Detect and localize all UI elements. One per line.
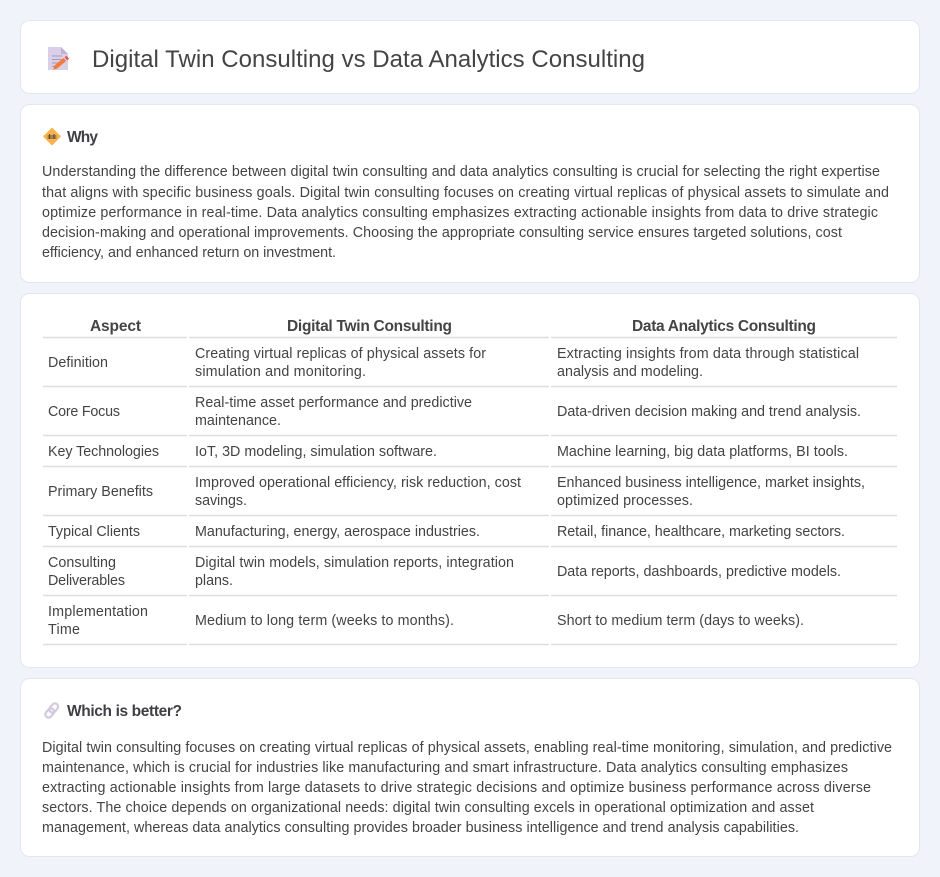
row: definition: analysis and modeling.	[557, 364, 703, 380]
row: key technologies	[48, 444, 848, 460]
table header	[90, 318, 816, 335]
row: key technologies: Key Technologies	[48, 444, 159, 460]
row: primary benefits: Improved operational efficiency, risk reduction, cost	[195, 475, 521, 491]
row: core focus: maintenance.	[195, 413, 281, 429]
row: core focus: Core Focus	[48, 404, 120, 420]
row: primary benefits: optimized processes.	[557, 493, 693, 509]
panel: title header	[20, 20, 920, 94]
row: primary benefits: Enhanced business intelligence, market insights,	[557, 475, 865, 491]
row: implementation time: Implementation	[48, 604, 148, 620]
table header: Data Analytics Consulting	[632, 318, 816, 335]
icon: warning diamond	[44, 128, 60, 144]
row: key technologies: Machine learning, big data platforms, BI tools.	[557, 444, 848, 460]
text block: why paragraph: optimize performance in real-time. Data analytics consulting emphasizes extracting actionable insights from data to drive strategic	[42, 205, 878, 221]
heading: why: Why	[67, 129, 98, 146]
row: typical clients: Retail, finance, healthcare, marketing sectors.	[557, 524, 845, 540]
row: definition: Definition	[48, 355, 108, 371]
text block: which is better paragraph: management, whereas data analytics consulting provides broader business intelligence and trend analysis capabilities.	[42, 820, 799, 836]
text block: why paragraph: efficiency, and enhanced return on investment.	[42, 245, 336, 261]
row: consulting deliverables: Deliverables	[48, 573, 125, 589]
text block: which is better paragraph: sectors. The choice depends on organizational needs: digital twin consulting excels in operational optimization and asset	[42, 800, 814, 816]
text block: why paragraph: that aligns with specific business goals. Digital twin consulting focuses on creating virtual replicas of physical assets to simulate and	[42, 185, 889, 201]
icon: document with pencil	[48, 47, 69, 70]
title: Digital Twin Consulting vs Data Analytics Consulting	[92, 46, 645, 73]
row: definition	[48, 346, 859, 380]
panel: comparison table	[20, 294, 920, 668]
row: typical clients: Manufacturing, energy, aerospace industries.	[195, 524, 480, 540]
table header: Digital Twin Consulting	[287, 318, 452, 335]
panel: why	[20, 104, 920, 282]
text block: why paragraph: Understanding the difference between digital twin consulting and data analytics consulting is crucial for selecting the right expertise	[42, 164, 880, 180]
row: implementation time: Time	[48, 622, 80, 638]
row: typical clients: Typical Clients	[48, 524, 140, 540]
panel: which is better	[20, 678, 920, 856]
row: implementation time	[48, 604, 804, 638]
heading: which is better: Which is better?	[67, 703, 182, 720]
row: definition: Extracting insights from data through statistical	[557, 346, 859, 362]
row: primary benefits: Primary Benefits	[48, 484, 153, 500]
row: implementation time: Short to medium term (days to weeks).	[557, 613, 804, 629]
row: consulting deliverables	[48, 555, 841, 589]
row: core focus	[48, 395, 861, 429]
row: consulting deliverables: plans.	[195, 573, 233, 589]
row: key technologies: IoT, 3D modeling, simulation software.	[195, 444, 437, 460]
table rules	[43, 338, 897, 644]
row: definition: Creating virtual replicas of physical assets for	[195, 346, 486, 362]
table header: Aspect	[90, 318, 141, 335]
text block: which is better paragraph: extracting actionable insights from large datasets to drive strategic decisions and optimize business performance across diverse	[42, 780, 871, 796]
row: primary benefits	[48, 475, 865, 509]
icon: chain link	[44, 702, 59, 719]
row: definition: simulation and monitoring.	[195, 364, 366, 380]
row: core focus: Real-time asset performance and predictive	[195, 395, 472, 411]
text block: which is better paragraph: Digital twin consulting focuses on creating virtual replicas of physical assets, enabling real-time monitoring, simulation, and predictive	[42, 740, 892, 756]
text block: which is better paragraph: maintenance, which is crucial for industries like manufacturing and smart infrastructure. Data analytics consulting emphasizes	[42, 760, 848, 776]
row: core focus: Data-driven decision making and trend analysis.	[557, 404, 861, 420]
row: consulting deliverables: Data reports, dashboards, predictive models.	[557, 564, 841, 580]
row: primary benefits: savings.	[195, 493, 247, 509]
row: implementation time: Medium to long term (weeks to months).	[195, 613, 454, 629]
text block: why paragraph: decision-making and operational improvements. Choosing the appropriate consulting service ensures targeted solutions, cost	[42, 225, 842, 241]
text block: which is better paragraph	[42, 740, 892, 836]
text block: why paragraph	[42, 164, 889, 261]
row: consulting deliverables: Digital twin models, simulation reports, integration	[195, 555, 514, 571]
row: typical clients	[48, 524, 845, 540]
row: consulting deliverables: Consulting	[48, 555, 116, 571]
